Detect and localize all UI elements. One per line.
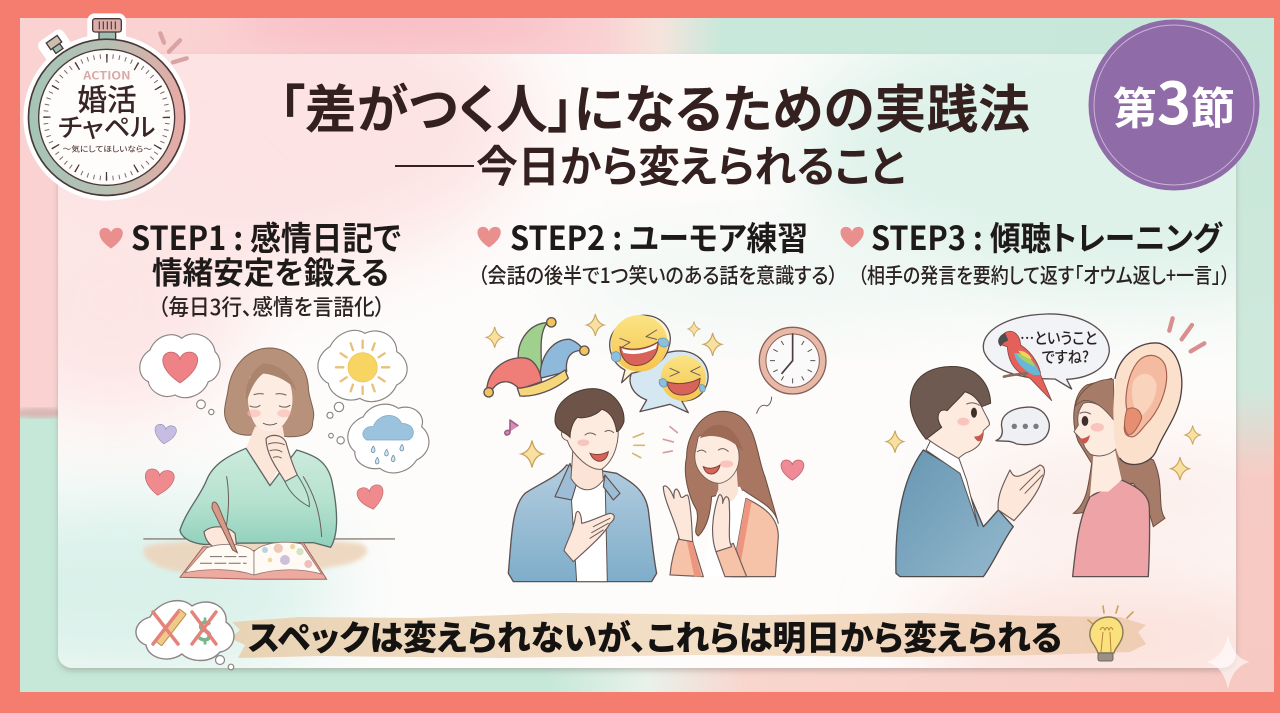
illustration: woman writing emotion diary	[140, 330, 429, 579]
icon: red crosses	[153, 612, 216, 644]
panel: step 2 heading	[478, 212, 838, 290]
icon: big ear	[1113, 343, 1182, 465]
icon: crown	[93, 19, 121, 41]
icon: heart	[781, 460, 804, 480]
icon: crossed-out specs thought cloud	[136, 601, 234, 670]
icon: heart	[100, 228, 123, 248]
stopwatch logo	[23, 13, 190, 201]
step 2 note: （会話の後半で1つ笑いのある話を意識する）	[478, 260, 838, 290]
section badge: 第3節	[1113, 57, 1235, 141]
icon: heart	[478, 227, 501, 247]
icon: light bulb	[1088, 606, 1133, 661]
table and wash	[143, 539, 395, 577]
icon: motion lines	[160, 33, 187, 62]
icon: jester hat	[484, 318, 589, 397]
icon: sparkles	[886, 425, 1200, 480]
icon: side button	[46, 35, 65, 55]
watch face mask	[50, 70, 163, 153]
icon: laugh lines pink	[663, 427, 677, 453]
illustration: couple laughing	[484, 314, 826, 582]
icon: ruler	[155, 609, 186, 646]
man figure	[508, 389, 657, 582]
pen	[212, 502, 237, 553]
woman figure	[1073, 378, 1165, 577]
dial ticks	[45, 56, 168, 179]
icon: rain thought cloud	[329, 404, 429, 473]
icon: sun thought cloud	[318, 330, 407, 418]
decorative sparkle corner	[1206, 635, 1250, 689]
icon: heart	[841, 227, 864, 247]
woman figure	[663, 411, 778, 577]
brush stroke	[230, 613, 1146, 658]
step 1 note: （毎日3行、感情を言語化）	[158, 290, 385, 322]
icon: money sign: $	[197, 610, 213, 650]
icon: emphasis lines	[1169, 318, 1204, 351]
message text: スペックは変えられないが、これらは明日から変えられる	[248, 611, 1062, 660]
heading line 2: 情緒安定を鍛える	[152, 248, 389, 293]
logo text: action: ACTION	[82, 68, 131, 84]
bottom message banner	[230, 611, 1146, 660]
bubble text: …ということ	[1020, 326, 1097, 348]
logo text: konkatsu: 婚活	[77, 76, 137, 120]
panel: step 1 heading	[100, 212, 401, 322]
illustration: active listening	[886, 314, 1204, 577]
logo text: chapel: チャペル	[58, 109, 155, 145]
icon: wall clock	[759, 327, 826, 394]
icon: floating hearts	[143, 424, 386, 512]
open diary	[180, 542, 327, 579]
small speech bubble	[996, 407, 1049, 445]
bubble text: ですね?	[1042, 345, 1089, 367]
subtitle: 今日から変えられること	[476, 133, 905, 195]
logo tagline: 〜気にしてほしいなら〜	[63, 144, 152, 155]
icon: laughing emoji bubbles	[610, 315, 708, 413]
icon: parrot	[998, 331, 1052, 401]
icon: heart thought cloud	[140, 334, 220, 415]
heading: STEP3 : 傾聴トレーニング	[871, 212, 1224, 260]
icon: squiggle	[757, 397, 772, 413]
section badge	[1088, 20, 1260, 190]
large speech bubble with parrot	[983, 314, 1109, 401]
icon: laugh lines	[633, 433, 644, 458]
panel: step 3 heading	[841, 212, 1230, 290]
icon: music note	[505, 420, 518, 435]
man figure	[896, 366, 1044, 577]
icon: sparkles	[486, 314, 722, 467]
heading line 1: STEP1 : 感情日記で	[131, 212, 401, 260]
heading: STEP2 : ユーモア練習	[510, 212, 808, 260]
woman figure	[180, 348, 337, 552]
step 3 note: （相手の発言を要約して返す「オウム返し+一言」）	[858, 260, 1230, 290]
watch ring	[28, 38, 186, 196]
title: 「差がつく人」になるための実践法	[279, 68, 1030, 143]
